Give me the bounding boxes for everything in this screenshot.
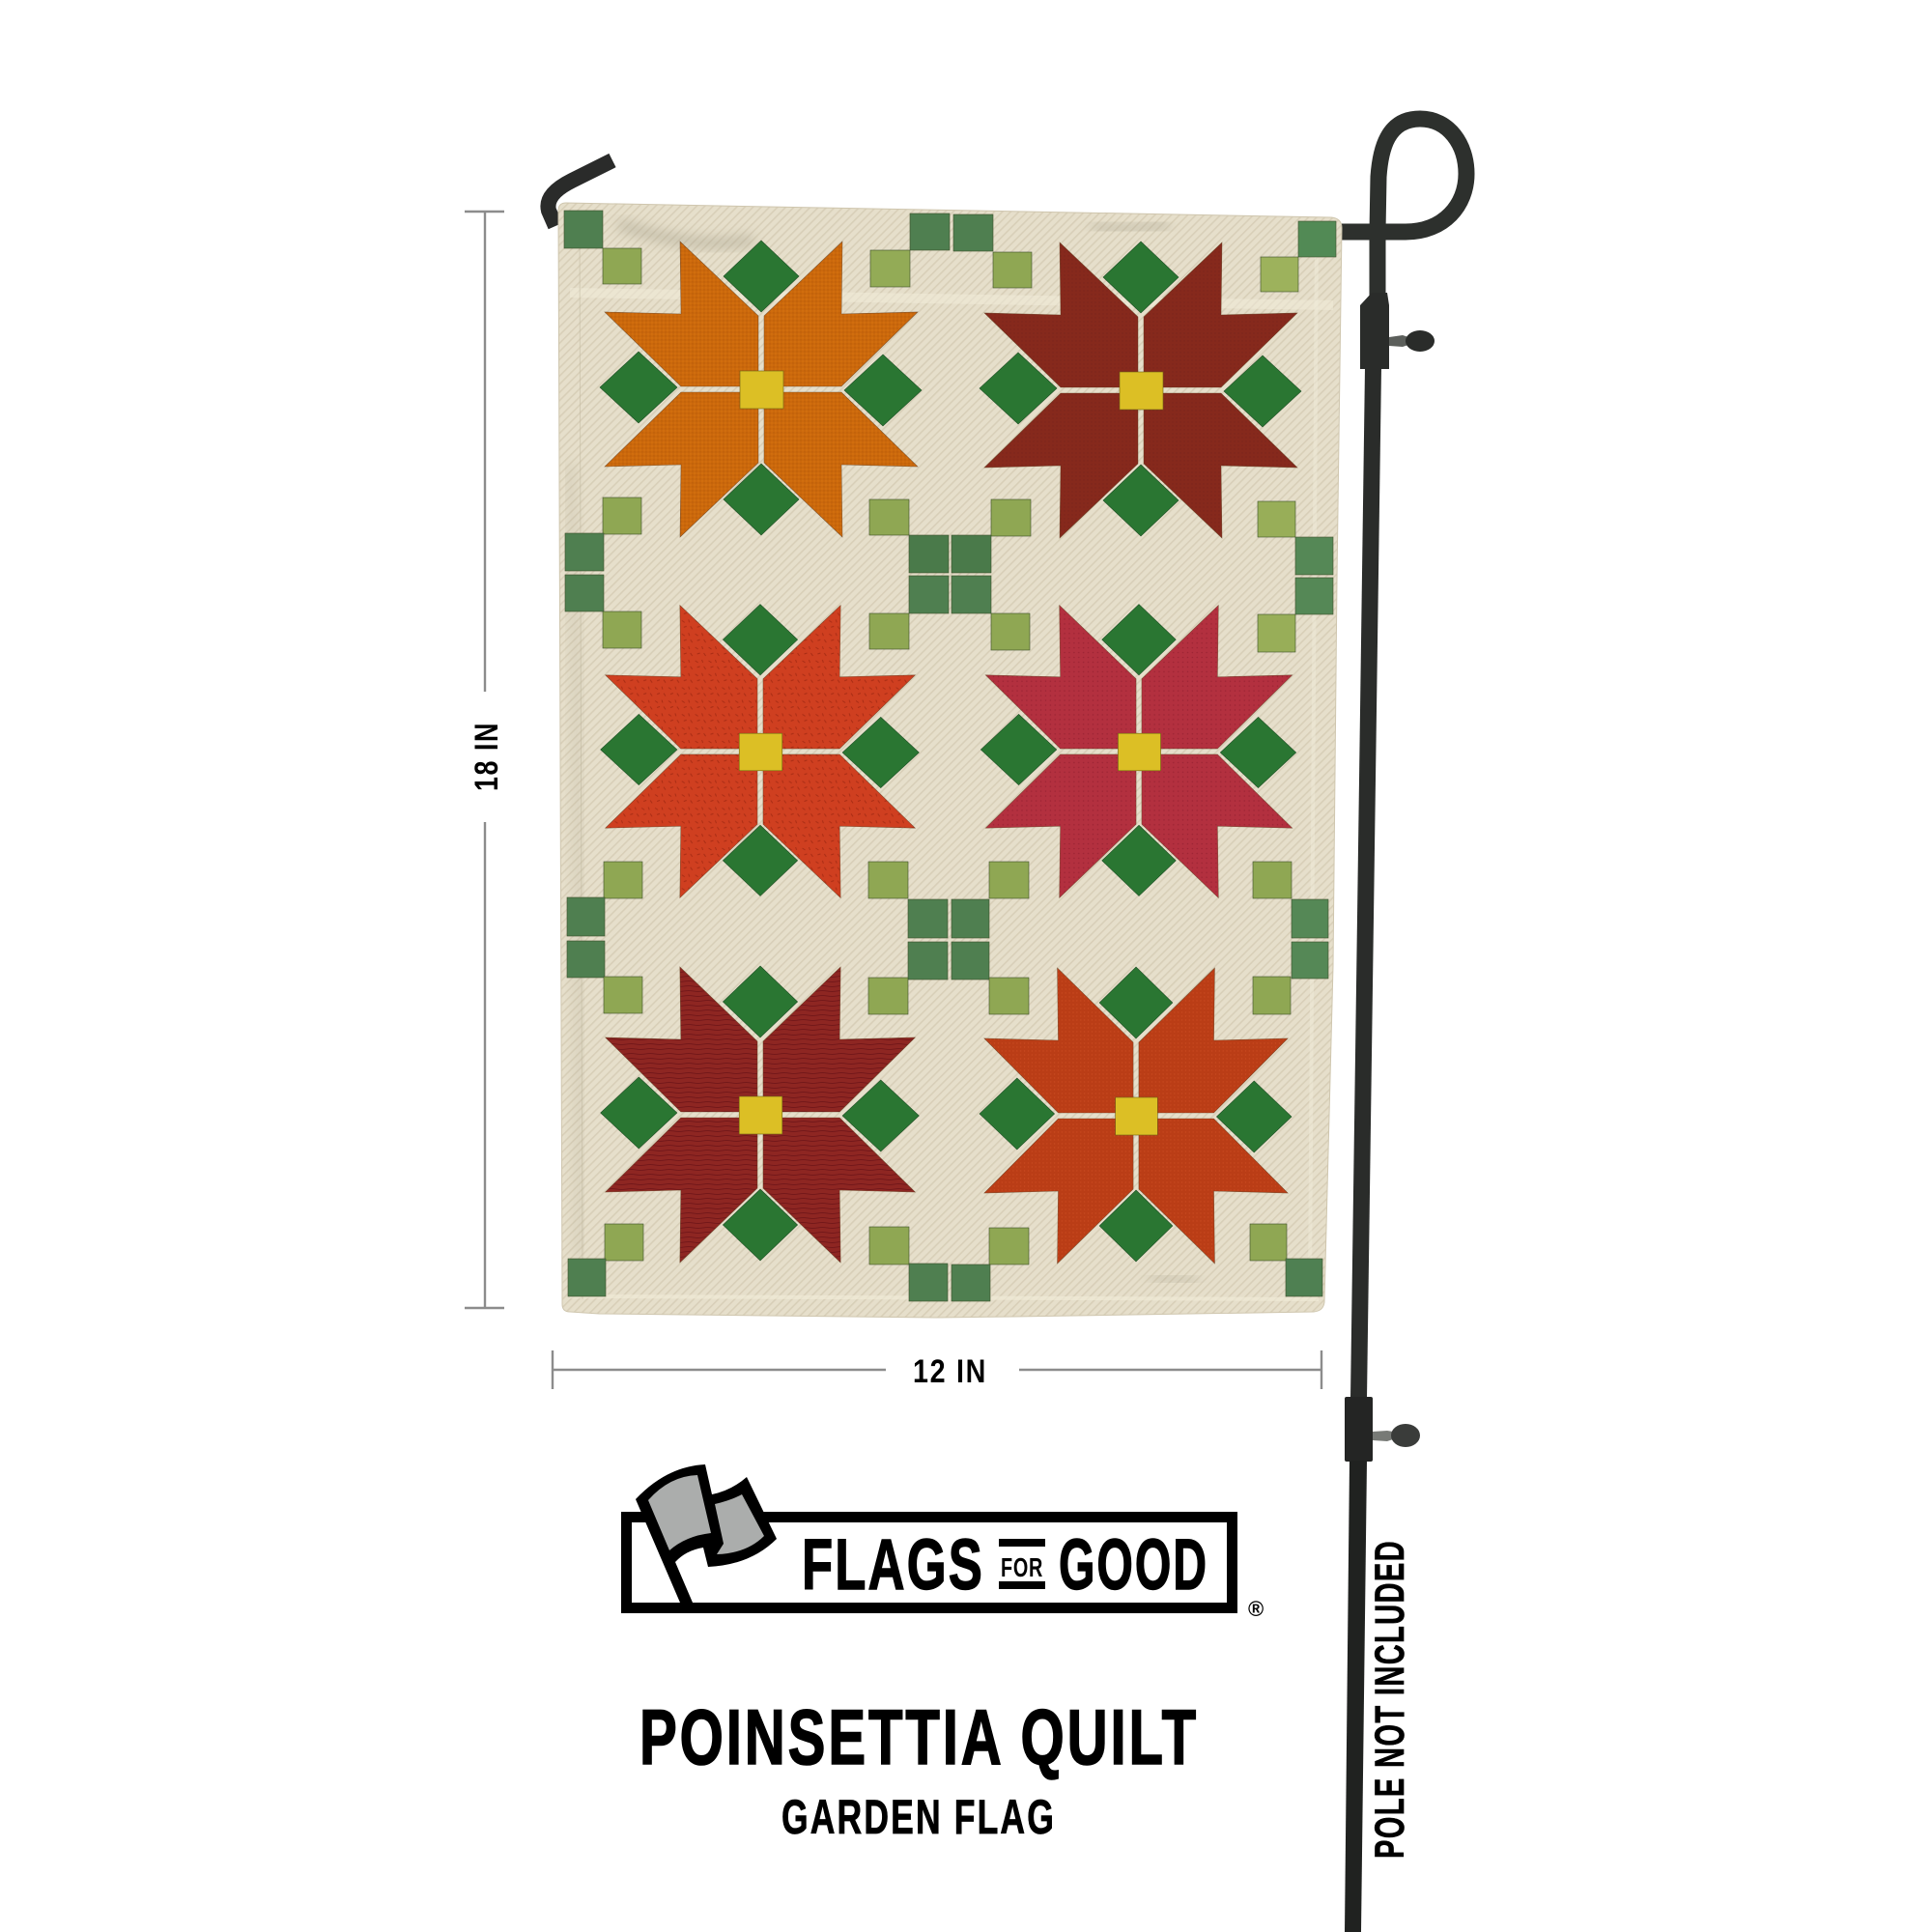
flag — [558, 203, 1342, 1318]
quilt squares: top left corner — [564, 211, 641, 284]
quilt squares: third row left — [567, 862, 642, 1013]
logo wordmark: GOOD — [1059, 1524, 1208, 1605]
logo frame — [626, 1517, 1233, 1607]
logo wordmark: ® — [1248, 1597, 1264, 1621]
dimension: width 12 in: 12 IN — [913, 1353, 987, 1390]
logo wordmark: FOR — [1001, 1552, 1043, 1582]
flag fabric — [558, 203, 1342, 1318]
fabric fold shading and hems — [570, 222, 1333, 1299]
quilt squares: top right corner — [1261, 221, 1336, 292]
dimension: height 18 in — [465, 212, 505, 1308]
icon: left hanger hook of the pole — [548, 160, 612, 226]
dimension: height 18 in: 18 IN — [469, 722, 505, 791]
garden pole — [1341, 119, 1466, 1932]
quilt squares: second row right — [1258, 501, 1333, 652]
logo wordmark — [802, 1524, 1264, 1621]
quilt squares: second row middle — [869, 499, 1031, 650]
flower: brick red — [601, 966, 919, 1263]
logo: Flags For Good — [626, 1464, 1264, 1621]
logo wordmark: FLAGS — [802, 1524, 984, 1605]
quilt squares: top middle — [870, 213, 1032, 288]
quilt squares: bottom right corner — [1250, 1224, 1322, 1296]
quilt squares: third row middle — [868, 862, 1029, 1014]
quilt squares: third row right — [1253, 862, 1328, 1014]
quilt squares: second row left — [565, 497, 641, 648]
flower: burnt orange — [980, 967, 1292, 1264]
logo flag icon — [636, 1464, 777, 1603]
quilt squares: bottom left corner — [568, 1224, 643, 1296]
quilt squares: bottom middle — [869, 1227, 1029, 1301]
note: pole not included: POLE NOT INCLUDED — [1367, 1540, 1413, 1859]
dimension: width 12 in — [553, 1350, 1321, 1390]
title: POINSETTIA QUILT — [639, 1694, 1199, 1781]
flower: pink — [980, 605, 1296, 897]
flower: orange — [600, 241, 922, 537]
flower: dark red — [980, 242, 1301, 538]
subtitle: GARDEN FLAG — [781, 1790, 1056, 1844]
flower: red orange speckled — [601, 605, 919, 897]
